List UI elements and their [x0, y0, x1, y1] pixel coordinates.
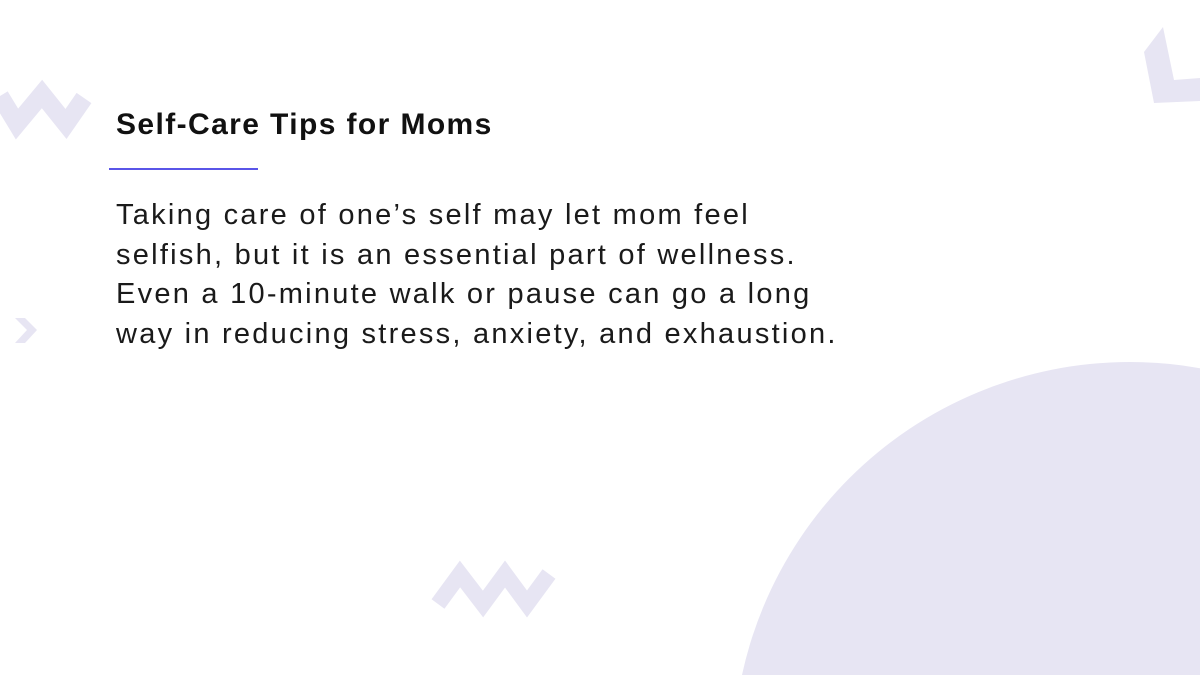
shape: zigzag bottom: [438, 574, 549, 604]
title: Self-Care Tips for Moms: [116, 108, 493, 141]
text block: body: Taking care of one’s self may let mom feel: [116, 199, 750, 231]
shape: corner top right: [1144, 27, 1200, 103]
shape: chevron left: [15, 318, 37, 343]
text block: body: way in reducing stress, anxiety, and exhaustion.: [116, 318, 838, 350]
text block: body: [116, 199, 838, 350]
text block: body: selfish, but it is an essential part of wellness.: [116, 238, 797, 270]
shape: large circle bottom right: [733, 362, 1200, 675]
shape: zigzag top left: [0, 94, 84, 124]
text block: body: Even a 10-minute walk or pause can go a long: [116, 278, 811, 310]
